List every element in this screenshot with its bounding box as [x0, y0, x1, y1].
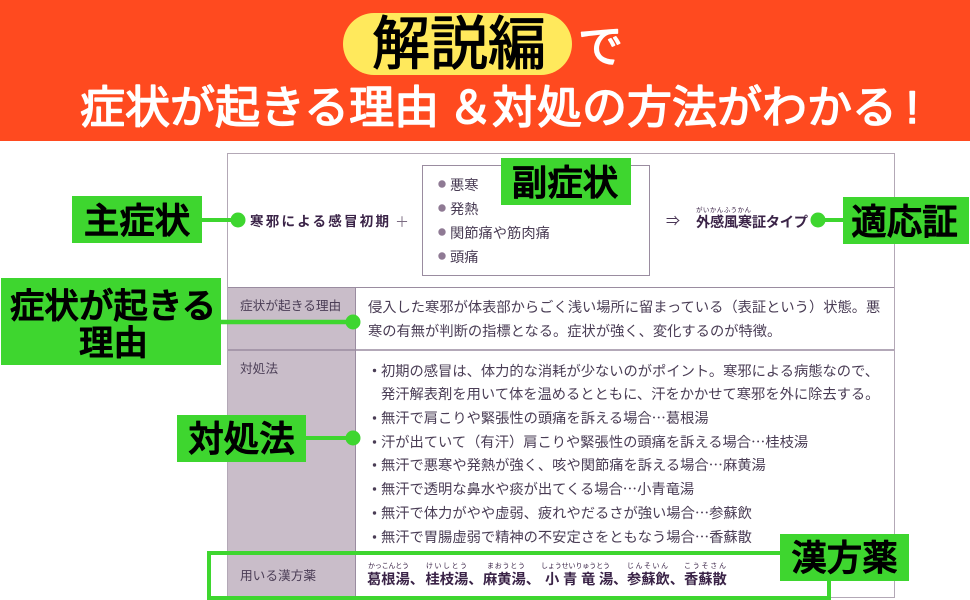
callout: 主症状: 主症状	[84, 193, 190, 244]
row: herbal medicines: 用いる漢方薬	[240, 565, 316, 584]
row: reason	[228, 288, 894, 350]
title line 1 suffix: で	[578, 10, 623, 75]
callout: 対処法: 対処法	[188, 411, 295, 462]
row: treatment: 初期の感冒は、体力的な消耗が少ないのがポイント。寒邪による病態なので、	[381, 360, 879, 381]
callout: 適応証	[810, 194, 969, 245]
row: treatment: 無汗で悪寒や発熱が強く、咳や関節痛を訴える場合…麻黄湯	[381, 454, 766, 475]
callout: 適応証: 適応証	[851, 194, 958, 245]
ruby and drug names: 麻黄湯、	[483, 568, 540, 589]
row: herbal medicines	[228, 552, 727, 597]
ruby and drug names: 葛根湯、	[367, 568, 424, 589]
callout: 症状が起きる理由: 理由	[79, 315, 148, 365]
callout: 漢方薬: 漢方薬	[791, 530, 898, 581]
arrow: ⇒	[666, 213, 680, 229]
row: reason: 侵入した寒邪が体表部からごく浅い場所に留まっている（表証という）状態。悪	[368, 296, 880, 317]
ruby and drug names: しょうせいりゅうとう	[541, 561, 610, 571]
row: treatment: 無汗で胃腸虚弱で精神の不安定さをともなう場合…香蘇散	[381, 526, 752, 547]
indication with ruby: がいかんふうかん	[696, 204, 752, 214]
title line 2: 症状が起きる理由	[80, 71, 439, 136]
row: treatment: 対処法	[240, 358, 278, 377]
ruby and drug names: 香蘇散	[684, 568, 727, 589]
sub symptoms box: 関節痛や筋肉痛	[450, 222, 550, 243]
row: treatment: 無汗で体力がやや虚弱、疲れやだるさが強い場合…参蘇飲	[381, 502, 752, 523]
table panel	[228, 154, 894, 598]
plus sign: ＋	[395, 214, 409, 230]
ruby and drug names: こうそさん	[684, 561, 726, 571]
title line 2: !	[906, 82, 919, 133]
row: treatment: 発汗解表剤を用いて体を温めるとともに、汗をかかせて寒邪を外に除去する。	[381, 383, 879, 404]
row: treatment: 無汗で透明な鼻水や痰が出てくる場合…小青竜湯	[381, 478, 694, 499]
ruby and drug names: 参蘇飲、	[627, 568, 684, 589]
header banner	[0, 0, 970, 141]
title line 2: ＆	[448, 71, 493, 136]
sub symptoms box: 頭痛	[450, 246, 479, 267]
sub symptoms box: 悪寒	[450, 174, 479, 195]
highlight frame: herbal row	[209, 553, 829, 598]
row: reason: 症状が起きる理由	[240, 295, 341, 314]
callout: 主症状	[72, 193, 246, 244]
ruby and drug names	[367, 561, 727, 589]
ruby and drug names: 桂枝湯、	[426, 568, 483, 589]
sub symptoms box: 発熱	[450, 198, 479, 219]
ruby and drug names: まおうとう	[487, 561, 525, 571]
callout: 症状が起きる理由	[1, 278, 360, 365]
ruby and drug names: かっこんとう	[368, 561, 409, 571]
ruby and drug names: じんそいん	[627, 561, 668, 571]
row: reason: 寒の有無が判断の指標となる。症状が強く、変化するのが特徴。	[368, 320, 781, 341]
title line 2: 対処の方法がわかる	[492, 71, 897, 136]
sub symptoms box	[422, 166, 650, 276]
row: treatment: 汗が出ていて（有汗）肩こりや緊張性の頭痛を訴える場合…桂枝湯	[381, 431, 808, 452]
indication with ruby: 外感風寒証タイプ	[696, 211, 808, 232]
main symptom text: 寒邪による感冒初期	[250, 213, 389, 229]
callout: 対処法	[177, 411, 360, 462]
top row: main symptom, sub symptoms, indication	[250, 166, 808, 276]
row: treatment	[228, 350, 894, 552]
ruby and drug names: けいしとう	[426, 561, 467, 571]
ruby and drug names: 小青竜湯、	[545, 568, 627, 589]
callout: 副症状: 副症状	[512, 155, 618, 206]
callout: 症状が起きる理由: 症状が起きる	[10, 278, 216, 328]
row: treatment: 無汗で肩こりや緊張性の頭痛を訴える場合…葛根湯	[381, 407, 709, 428]
